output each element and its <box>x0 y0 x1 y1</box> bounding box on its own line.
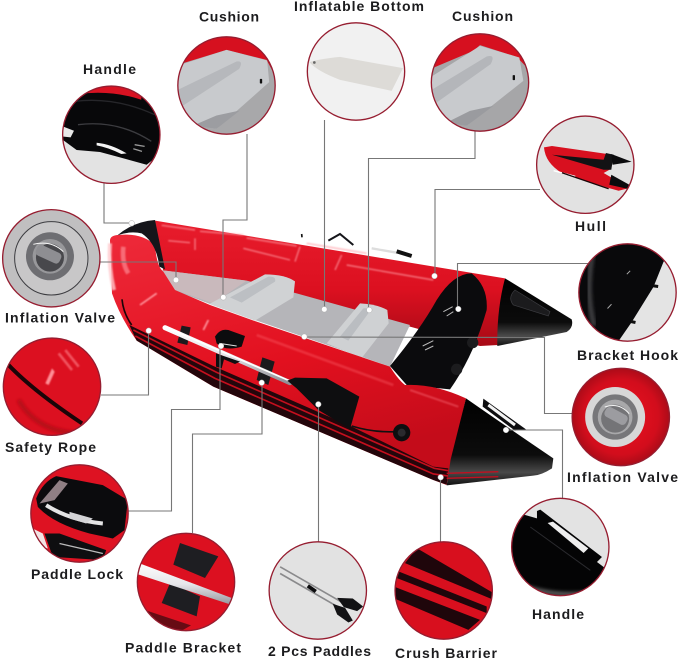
callout: handle (top) <box>61 85 161 185</box>
black transom <box>390 273 487 389</box>
stern cushion <box>327 303 389 358</box>
leader line: paddles <box>318 404 320 542</box>
leader line: handle <box>104 183 131 223</box>
callout: paddle bracket <box>136 532 236 632</box>
near tube <box>110 235 466 485</box>
label: handle: Handle <box>83 61 136 77</box>
paddle lock <box>215 330 245 368</box>
leader line: bracket hook <box>458 264 589 309</box>
label: right inflation valve: Inflation Valve <box>567 469 678 485</box>
paddle mounting brackets <box>177 326 275 385</box>
far tube rope and accessories <box>328 234 353 245</box>
callout: bracket hook <box>578 243 677 342</box>
label: paddle lock: Paddle Lock <box>31 566 123 582</box>
leader line: safety rope <box>101 331 148 395</box>
label: left inflation valve: Inflation Valve <box>5 310 115 326</box>
label: bracket hook: Bracket Hook <box>577 347 678 363</box>
floor <box>160 270 410 367</box>
leader line: left inflation valve <box>100 262 176 280</box>
leader line: paddle bracket <box>192 383 262 533</box>
far tube <box>155 221 505 346</box>
near nose cone <box>447 398 553 485</box>
callout: left inflation valve <box>1 208 101 308</box>
callout: right inflation valve <box>571 367 671 467</box>
inflation valve <box>352 424 410 441</box>
label: paddle bracket: Paddle Bracket <box>125 640 241 656</box>
callout: safety rope <box>2 337 102 437</box>
callout: inflatable bottom <box>306 22 406 121</box>
callout: paddle lock <box>30 464 129 563</box>
paddle shaft <box>165 328 290 383</box>
label: bottom handle: Handle <box>532 606 584 622</box>
leader line: right cushion <box>368 131 475 310</box>
far nose cone <box>497 278 572 346</box>
label: hull: Hull <box>575 218 606 234</box>
callout: crush barrier <box>394 541 494 640</box>
callout: bottom handle <box>510 497 610 597</box>
label: safety rope: Safety Rope <box>5 439 96 455</box>
leader line: left cushion <box>223 134 247 297</box>
label: two paddles: 2 Pcs Paddles <box>268 643 371 659</box>
label: left cushion: Cushion <box>199 8 259 24</box>
safety rope <box>122 299 132 325</box>
callout: right cushion <box>430 33 530 132</box>
crush barrier stripes <box>129 325 448 485</box>
leader line: bottom handle <box>506 430 562 498</box>
leader line: crush barrier <box>440 477 442 542</box>
bow cushion <box>209 274 295 321</box>
callout: two paddles <box>268 541 368 640</box>
bow black patch <box>117 220 165 269</box>
leader line: right inflation valve <box>304 337 572 414</box>
leader line: hull <box>435 190 540 276</box>
callout: left cushion <box>177 36 276 135</box>
anchor dots <box>129 220 509 480</box>
boat <box>110 220 572 485</box>
label: right cushion: Cushion <box>452 8 513 24</box>
leader line: paddle lock <box>128 346 220 511</box>
leader line: inflatable bottom <box>324 120 326 309</box>
paddle blade <box>287 378 359 429</box>
callout: hull <box>535 115 635 215</box>
